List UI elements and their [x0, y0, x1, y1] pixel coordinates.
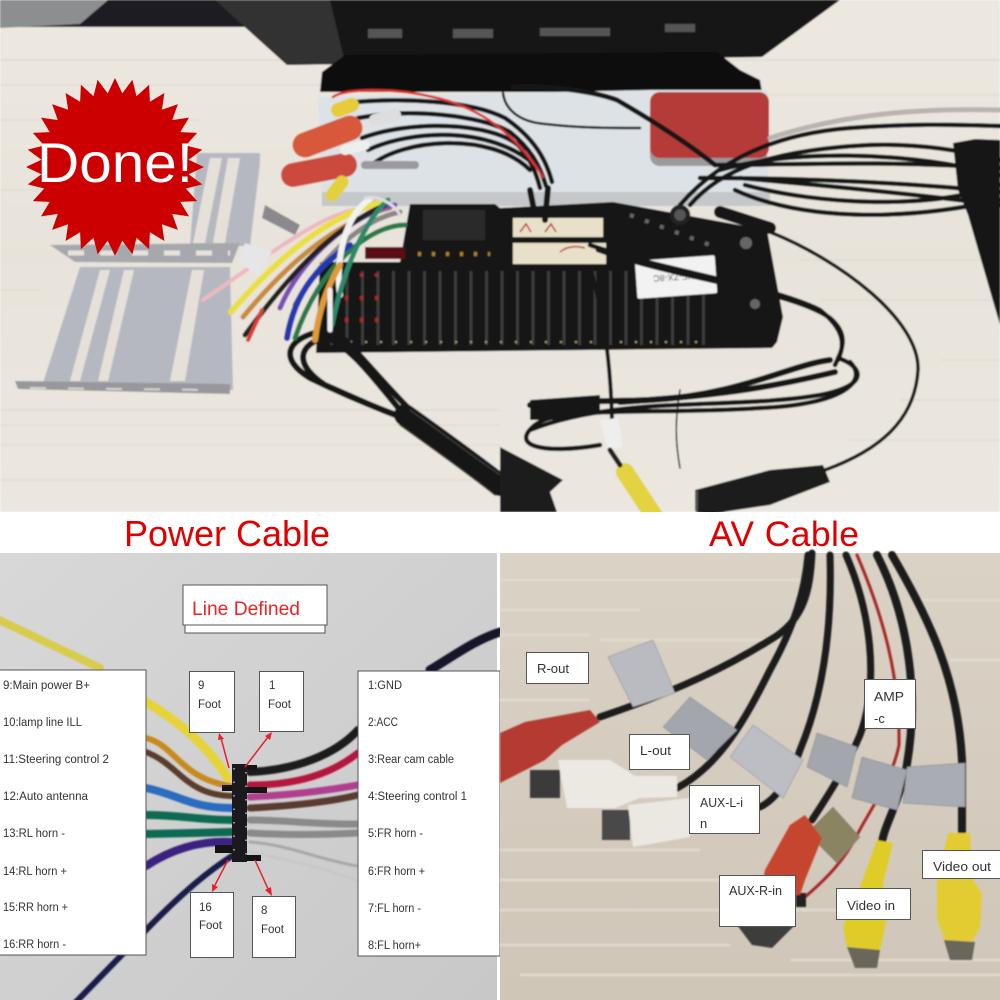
label: AUX-R-in [720, 876, 796, 926]
heading: Power Cable: Power Cable [124, 513, 330, 554]
black plug lower centre [500, 447, 563, 512]
label: AMP-c: -c [874, 711, 885, 726]
starburst badge: Done! [26, 78, 204, 256]
right pin list: 4:Steering control 1 [368, 791, 467, 803]
right pin list: 5:FR horn - [368, 828, 423, 840]
label: Video out: Video out [933, 859, 991, 874]
callout: 1 Foot: 1 [269, 680, 275, 692]
left pin list: 16:RR horn - [3, 939, 66, 951]
lower mounting bracket [15, 267, 233, 394]
left pin list: 12:Auto antenna [3, 791, 89, 803]
callout: 1 Foot [260, 672, 304, 732]
callout: 16 Foot: 16 [199, 902, 212, 914]
black pillar at right edge [953, 139, 1000, 325]
RCA plugs on head unit [293, 105, 415, 195]
right cable coil [672, 110, 1000, 228]
label: AMP-c [864, 680, 916, 728]
right pin list: 2:ACC [368, 717, 398, 729]
panel: power cable line definition [0, 553, 500, 1000]
right pin list: 1:GND [368, 680, 402, 692]
panel: top product photo [0, 0, 1000, 525]
label: R-out [526, 652, 588, 684]
callout: Line Defined: Line Defined [192, 599, 300, 620]
AV cable photo [500, 553, 982, 968]
label: AMP-c: AMP [874, 689, 904, 704]
callout: 1 Foot: Foot [268, 699, 292, 711]
label: AUX-L-in [690, 786, 760, 834]
heading: AV Cable: AV Cable [709, 514, 859, 554]
cables from RCA plugs to connector [333, 87, 715, 220]
black cables [600, 553, 962, 907]
callout: 9 Foot: 9 [198, 680, 204, 692]
left pin list: 15:RR horn + [3, 902, 68, 914]
left pin list: 9:Main power B+ [3, 680, 90, 692]
long cable to barrel jack [770, 232, 918, 470]
right pin list: 3:Rear cam cable [368, 754, 454, 766]
left pin list: 14:RL horn + [3, 866, 67, 878]
yellow RCA plug video in [843, 840, 893, 968]
label: Video out [922, 850, 1000, 878]
monitor back [215, 0, 840, 65]
callout: 16 Foot [190, 892, 234, 958]
callout: 9 Foot: Foot [198, 699, 222, 711]
red adhesive pad [650, 92, 769, 166]
left pin list: 10:lamp line ILL [3, 717, 83, 729]
coiled cable lower right [526, 245, 858, 468]
callout: Line Defined [183, 585, 327, 633]
red RCA plug [500, 710, 600, 783]
mounting rails on monitor [368, 24, 695, 38]
yellow RCA plug video out [937, 833, 982, 960]
starburst badge: Done!: Done! [37, 131, 193, 194]
right pin list: 7:FL horn - [368, 903, 421, 915]
label: Video in: Video in [847, 898, 895, 913]
label: Video in [836, 888, 910, 920]
left pin list [0, 670, 146, 955]
label: L-out: L-out [640, 743, 671, 758]
red arrows [212, 732, 272, 896]
callout: 9 Foot [190, 672, 234, 732]
right pin list: 8:FL horn+ [368, 940, 421, 952]
callout: 8 Foot: Foot [261, 924, 285, 936]
connector tags [262, 205, 300, 235]
red RCA plug AUX-R [737, 815, 822, 948]
model sticker [635, 255, 717, 299]
wire photo [0, 618, 500, 1000]
callout: 8 Foot: 8 [261, 905, 267, 917]
callout: 16 Foot: Foot [199, 920, 223, 932]
white RCA plug L-out [530, 760, 677, 808]
silver head unit [318, 88, 768, 192]
white connector blocks [513, 218, 606, 264]
bracket under monitor [320, 52, 762, 92]
barrel jack [695, 465, 830, 514]
label: R-out: R-out [537, 661, 569, 676]
wire tag [238, 243, 272, 275]
table backdrop at top left [0, 0, 255, 27]
yellow RCA plug with tag [600, 418, 660, 525]
right pin list [358, 671, 500, 956]
left pin list: 11:Steering control 2 [3, 754, 109, 766]
black radio body with cooling fins [316, 202, 783, 353]
label: AUX-L-in: n [700, 816, 707, 831]
silver cable tags [608, 640, 965, 863]
left pin list: 13:RL horn - [3, 828, 65, 840]
label: AUX-L-in: AUX-L-i [700, 795, 743, 810]
label: AUX-R-in: AUX-R-in [729, 883, 782, 898]
plastic wrap [0, 0, 108, 28]
callout: 8 Foot [252, 896, 296, 958]
white RCA plug AUX-L [602, 798, 690, 847]
label: L-out [630, 734, 690, 770]
wire connector [215, 764, 267, 862]
right pin list: 6:FR horn + [368, 866, 425, 878]
colored power harness wires [203, 197, 405, 340]
panel: AV cable labels [500, 553, 1000, 1000]
black bundled cable with ties [290, 332, 505, 495]
upper mounting bracket [50, 153, 260, 263]
model sticker: ZXF-ZX-8C [652, 270, 699, 284]
